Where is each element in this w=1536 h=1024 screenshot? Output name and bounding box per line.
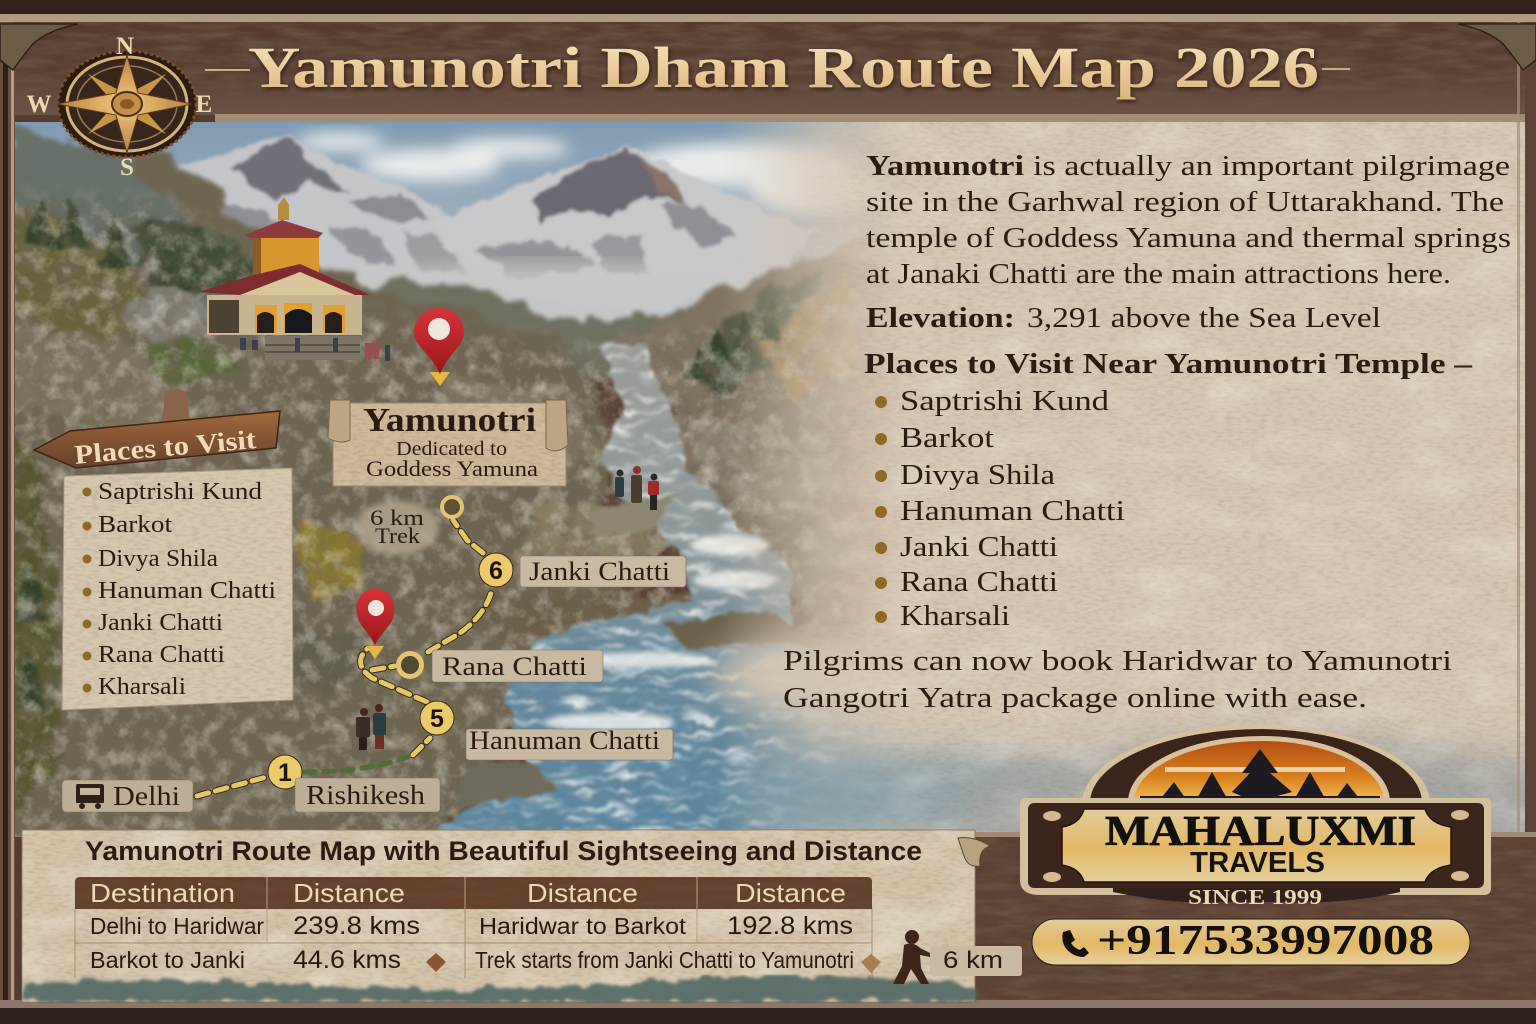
text block: Yamunotri introduction: [866, 150, 1511, 290]
trees: [14, 195, 782, 710]
text block: elevation: 3,291 above the Sea Level: [1027, 302, 1381, 334]
trekking route line: [197, 520, 492, 796]
list: places near temple: Janki Chatti: [900, 531, 1058, 563]
list items: Divya Shila: [98, 546, 218, 572]
panel: bottom right wood: [975, 832, 1536, 1006]
logo trees: [1140, 749, 1380, 802]
label: 6 km trek: [355, 501, 439, 555]
text block: booking note: Pilgrims can now book Haridwar to Yamunotri: [783, 645, 1452, 677]
marker: Rana Chatti ring: [396, 651, 424, 679]
river: [434, 340, 882, 830]
list items: Janki Chatti: [98, 610, 223, 636]
signpost: Places to Visit: Places to Visit: [73, 424, 257, 470]
label: 6 km trek: 6 km: [370, 505, 424, 530]
list items: Rana Chatti: [98, 642, 225, 668]
compass letters: W: [26, 91, 52, 118]
phone number pill: [1032, 918, 1470, 965]
label: Rishikesh: Rishikesh: [306, 780, 426, 810]
logo ribbon: [1113, 888, 1400, 902]
panel: parchment background: [710, 122, 1536, 880]
table title: Yamunotri Route Map with Beautiful Sightseeing and Distance: [85, 836, 922, 866]
marker: stop 6: 6: [489, 557, 503, 585]
text block: Yamunotri introduction: is actually an important pilgrimage: [1033, 150, 1510, 182]
marker: stop 1: [268, 755, 302, 789]
figures: pilgrims on the upper path: [615, 466, 659, 510]
table rows: 192.8 kms: [727, 912, 853, 940]
list: places near temple: Rana Chatti: [900, 566, 1058, 598]
list items: Saptrishi Kund: [98, 479, 262, 505]
logo plaque: [1062, 809, 1451, 882]
text block: Yamunotri introduction: site in the Garhwal region of Uttarakhand. The: [866, 186, 1504, 218]
label: Yamunotri scroll banner: Yamunotri: [363, 402, 536, 439]
icon: telephone: [1062, 930, 1089, 957]
icon: map pin Rana Chatti: [357, 589, 394, 659]
title rule left: [205, 69, 250, 71]
table rows: Haridwar to Barkot: [479, 913, 687, 939]
panel: header band: [0, 0, 1536, 122]
compass letters: E: [196, 91, 212, 118]
list items: Kharsali: [98, 674, 186, 700]
list: places near temple: Saptrishi Kund: [900, 385, 1110, 417]
title rule right: [1322, 68, 1350, 70]
label: 6 km trek: Trek: [375, 523, 420, 548]
logo: Mahaluxmi Travels: [1020, 724, 1491, 909]
title: Yamunotri Dham Route Map 2026: [248, 35, 1319, 100]
table rows: Delhi to Haridwar: [90, 913, 264, 939]
list items: [98, 479, 276, 700]
table header: Distance: [293, 878, 405, 908]
signpost: Places to Visit: [34, 389, 280, 470]
list: places near temple: [875, 385, 1125, 632]
compass letters: S: [120, 154, 134, 181]
logo arch: [1082, 724, 1430, 802]
marker: stop 6: [479, 553, 513, 587]
diamond markers: [426, 953, 881, 973]
phone number pill: +917533997008: [1097, 918, 1434, 964]
table header: Distance: [527, 878, 638, 908]
table header: Distance: [735, 878, 846, 908]
label: Hanuman Chatti: Hanuman Chatti: [469, 726, 660, 755]
panel: route distance table: [22, 830, 975, 1002]
label: Yamunotri scroll banner: Goddess Yamuna: [366, 456, 538, 481]
panel: bottom frame: [0, 1000, 1536, 1024]
logo: Mahaluxmi Travels: MAHALUXMI: [1105, 809, 1416, 855]
mountains: [175, 134, 816, 282]
marker: top of trek: [440, 495, 464, 519]
list items: Barkot: [98, 512, 172, 538]
icon: Yamunotri temple: [198, 197, 390, 361]
label: 6 km: 6 km: [943, 947, 1003, 974]
table rows: 239.8 kms: [293, 912, 420, 940]
list: places near temple: Kharsali: [900, 600, 1010, 632]
marker: stop 1: 1: [278, 759, 292, 787]
text block: elevation: [866, 302, 1381, 334]
list: places near temple: Barkot: [900, 422, 994, 454]
list: places near temple: Divya Shila: [900, 459, 1055, 491]
figures: pilgrims on the lower path: [356, 704, 386, 750]
text block: elevation: Elevation:: [866, 302, 1015, 334]
icon: map pin Yamunotri: [414, 308, 464, 386]
marker: stop 5: [420, 701, 454, 735]
icon: compass rose: [26, 33, 212, 181]
text block: Yamunotri introduction: at Janaki Chatti are the main attractions here.: [866, 258, 1451, 290]
compass letters: [26, 33, 212, 181]
label: Rana Chatti: Rana Chatti: [442, 652, 587, 681]
label: 6 km: [930, 946, 1022, 976]
marker: stop 5: 5: [430, 705, 444, 733]
table rows: Barkot to Janki: [90, 947, 245, 973]
table rows: Trek starts from Janki Chatti to Yamunotri: [475, 947, 854, 973]
label: Janki Chatti: Janki Chatti: [529, 557, 670, 586]
list: places near temple: Hanuman Chatti: [900, 495, 1125, 527]
label: Rana Chatti: [432, 650, 603, 682]
icon: hiker: [893, 930, 930, 984]
list bullets: [82, 488, 92, 692]
ornament: top left corner: [0, 24, 78, 70]
table rows: [90, 912, 854, 974]
panel: places to visit list: [62, 468, 293, 710]
compass letters: N: [116, 33, 134, 60]
logo board: [1020, 798, 1491, 895]
text block: Yamunotri introduction: Yamunotri: [866, 150, 1024, 182]
label: Delhi with bus icon: Delhi: [113, 781, 180, 811]
logo: Mahaluxmi Travels: TRAVELS: [1190, 847, 1325, 879]
table header: Destination: [90, 878, 235, 908]
ornament: table corner scroll: [958, 838, 990, 866]
text block: booking note: [783, 645, 1452, 714]
list items: Hanuman Chatti: [98, 578, 276, 604]
label: Rishikesh: [295, 778, 440, 812]
ornament: top right corner: [1458, 24, 1536, 70]
label: Yamunotri scroll banner: [328, 400, 568, 486]
text block: booking note: Gangotri Yatra package online with ease.: [783, 682, 1367, 714]
table header: [75, 877, 872, 909]
terrain: valley, banks and left hillside: [5, 125, 940, 850]
logo: Mahaluxmi Travels: SINCE 1999: [1188, 885, 1322, 909]
label: Delhi with bus icon: [62, 780, 193, 812]
panel: illustrated map: [15, 122, 891, 837]
table rows: 44.6 kms: [293, 946, 401, 974]
label: Yamunotri scroll banner: Dedicated to: [396, 438, 507, 460]
text block: Yamunotri introduction: temple of Goddess Yamuna and thermal springs: [866, 222, 1511, 254]
rocky texture overlays: [15, 189, 862, 837]
heading: places near temple: Places to Visit Near Yamunotri Temple –: [864, 348, 1473, 380]
